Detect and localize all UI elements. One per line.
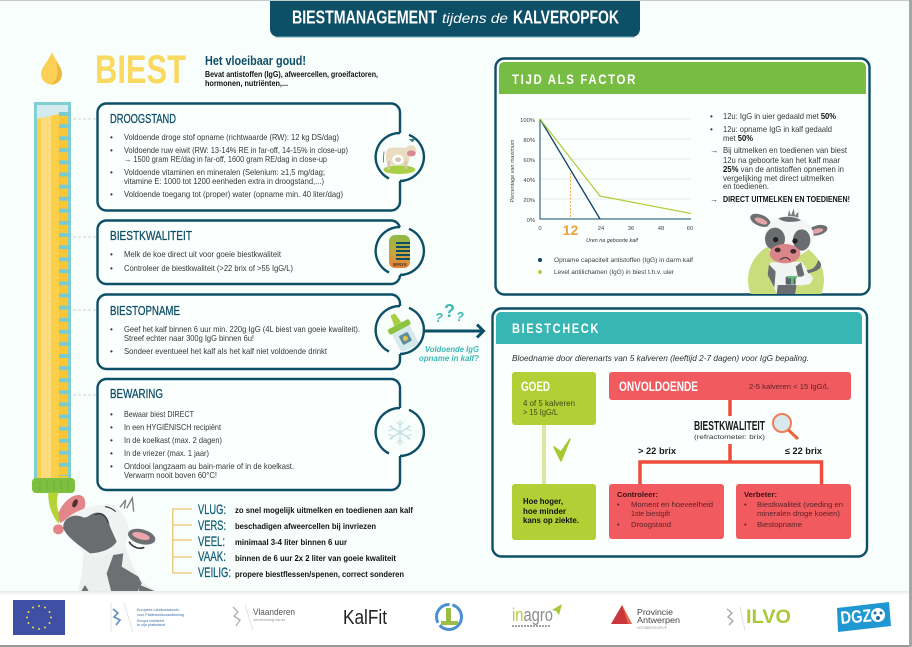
bullet list: bewaring: In de koelkast (max. 2 dagen) bbox=[124, 436, 222, 445]
bullet list: droogstand: • bbox=[110, 146, 113, 155]
logo: Europees Landbouwfonds bbox=[111, 603, 184, 632]
icon: snowflake bbox=[388, 420, 412, 445]
title banner: BIESTMANAGEMENT bbox=[292, 8, 437, 28]
line chart: antibodies over time: 0% bbox=[527, 218, 535, 224]
text: key findings: • bbox=[710, 125, 713, 134]
panel: biestopname bbox=[98, 294, 424, 369]
box: verbeter: Verbeter: bbox=[744, 490, 777, 499]
bullet list: bewaring: • bbox=[110, 449, 113, 458]
box: controleer: • bbox=[617, 520, 620, 529]
arrow to biestcheck bbox=[419, 301, 484, 363]
line chart: antibodies over time: 24 bbox=[598, 226, 605, 232]
question marks: ? bbox=[456, 309, 464, 324]
bullet list: biestkwaliteit: • bbox=[110, 264, 113, 273]
bullet list: droogstand: Voldoende vitaminen en mineralen (Selenium: ≥1,5 mg/dag; bbox=[124, 168, 325, 177]
logo: DGZ bbox=[837, 602, 891, 632]
label: biestkwaliteit refractometer: BIESTKWALITEIT bbox=[694, 419, 765, 433]
VAAK: binnen de 6 uur 2x 2 liter van goeie kwaliteit bbox=[235, 554, 396, 563]
bullet list: biestkwaliteit: Melk de koe direct uit voor goeie biestkwaliteit bbox=[124, 250, 282, 259]
line chart: antibodies over time: 60 bbox=[687, 226, 693, 232]
bullet list: biestkwaliteit: Controleer de biestkwaliteit (>22 brix of >55 IgG/L) bbox=[124, 264, 293, 273]
logo: Europees Landbouwfonds: in zijn platteland bbox=[137, 623, 165, 627]
line chart: antibodies over time: Percentage van maximum bbox=[510, 139, 516, 202]
logo: round L emblem bbox=[436, 604, 462, 630]
text: key findings: 25% van de antistoffen opnemen in bbox=[723, 165, 844, 174]
icon: brix meter: BRIX bbox=[393, 262, 408, 268]
bracket bbox=[173, 509, 192, 573]
bullet list: bewaring: • bbox=[110, 410, 113, 419]
text: key findings: DIRECT UITMELKEN EN TOEDIENEN! bbox=[723, 195, 850, 204]
box: controleer: • bbox=[617, 500, 620, 509]
text: key findings: → bbox=[710, 146, 718, 155]
bullet list: bewaring: Verwarm nooit boven 60°C! bbox=[124, 471, 217, 480]
callout: voldoende IgG opname: opname in kalf? bbox=[419, 354, 479, 363]
intro sentence: Bloedname door dierenarts van 5 kalveren (leeftijd 2-7 dagen) voor IgG bepaling. bbox=[512, 353, 809, 363]
box: hoe hoger: Hoe hoger, bbox=[523, 497, 563, 506]
bullet list: droogstand: • bbox=[110, 168, 113, 177]
text: key findings: 12u: IgG in uier gedaald met 50% bbox=[723, 112, 837, 121]
box: hoe hoger: hoe minder bbox=[523, 507, 566, 516]
text: key findings: met 50% bbox=[723, 134, 754, 143]
text: key findings: Bij uitmelken en toedienen van biest bbox=[723, 146, 848, 155]
decision tree connectors bbox=[640, 400, 822, 484]
box: onvoldoende: 2-5 kalveren < 15 IgG/L bbox=[749, 382, 829, 391]
bullet list: biestkwaliteit: • bbox=[110, 250, 113, 259]
logo: Europees Landbouwfonds: voor Plattelandsontwikkeling bbox=[137, 613, 184, 617]
bullet list: bewaring: • bbox=[110, 462, 113, 471]
logo: Vlaanderen: Vlaanderen bbox=[253, 607, 295, 618]
line chart: antibodies over time bbox=[510, 118, 693, 244]
bullet list: droogstand bbox=[110, 133, 348, 199]
panel: biestkwaliteit bbox=[98, 220, 424, 284]
title banner: KALVEROPFOK bbox=[513, 8, 619, 28]
box: onvoldoende bbox=[609, 372, 851, 400]
VEILIG bbox=[198, 564, 404, 580]
intro text: Bevat antistoffen (IgG), afweercellen, groeifactoren, bbox=[205, 70, 378, 79]
chart legend: Opname capaciteit antistoffen (IgG) in darm kalf bbox=[554, 257, 693, 264]
line chart: antibodies over time: 100% bbox=[520, 118, 535, 124]
line chart: antibodies over time: 12 bbox=[563, 222, 578, 238]
line chart: antibodies over time: 20% bbox=[523, 198, 535, 204]
heading: BIEST: BIEST bbox=[95, 48, 186, 92]
illustration: calf drinking bbox=[48, 493, 160, 593]
bullet list: bewaring: Ontdooi langzaam au bain-marie of in de koelkast. bbox=[124, 462, 294, 471]
VEILIG: propere biestflessen/spenen, correct sonderen bbox=[235, 570, 404, 579]
chart legend: Level antilichamen (IgG) in biest t.h.v. uier bbox=[554, 269, 675, 276]
icon: feeding bottle bbox=[382, 309, 421, 354]
logo: Vlaanderen bbox=[233, 605, 295, 630]
panel: droogstand bbox=[98, 104, 424, 210]
bullet list: droogstand: Voldoende ruw eiwit (RW: 13-14% RE in far-off, 14-15% in close-up) bbox=[124, 146, 348, 155]
VERS bbox=[198, 517, 376, 533]
bullet list: bewaring: In de vriezer (max. 1 jaar) bbox=[124, 449, 209, 458]
header: biestcheck bbox=[496, 312, 862, 344]
heading: biestopname: BIESTOPNAME bbox=[110, 303, 180, 318]
logo: KalFit: KalFit bbox=[343, 607, 387, 629]
logo: ILVO: ILVO bbox=[746, 607, 791, 628]
heading: biestkwaliteit: BIESTKWALITEIT bbox=[110, 228, 192, 243]
title banner: tijdens de bbox=[442, 10, 508, 26]
bullet list: bewaring: • bbox=[110, 436, 113, 445]
icon: brix meter bbox=[389, 235, 410, 268]
panel: tijd als factor bbox=[496, 58, 870, 318]
VERS: beschadigen afweercellen bij invriezen bbox=[235, 522, 376, 531]
header: tijd als factor: TIJD ALS FACTOR bbox=[512, 71, 637, 87]
box: goed: 4 of 5 kalveren bbox=[523, 399, 575, 408]
VEILIG: VEILIG: bbox=[198, 564, 231, 580]
callout: voldoende IgG opname bbox=[419, 345, 479, 363]
heading: droogstand: DROOGSTAND bbox=[110, 111, 176, 126]
box: verbeter: mineralen droge koeien) bbox=[757, 509, 840, 518]
logo: Vlaanderen: verbeelding werkt bbox=[253, 617, 286, 622]
box: verbeter: • bbox=[744, 500, 747, 509]
graduated tube of colostrum bbox=[32, 102, 75, 493]
bullet list: biestopname bbox=[110, 325, 360, 356]
bullet list: droogstand: Voldoende droge stof opname (richtwaarde (RW): 12 kg DS/dag) bbox=[124, 133, 339, 142]
bullet list: bewaring: Bewaar biest DIRECT bbox=[124, 410, 194, 419]
box: hoe hoger bbox=[512, 484, 596, 540]
text: key findings: vergelijking met direct uitmelken bbox=[723, 174, 834, 183]
box: goed bbox=[512, 372, 596, 425]
VEEL: minimaal 3-4 liter binnen 6 uur bbox=[235, 538, 347, 547]
heading: bewaring: BEWARING bbox=[110, 386, 163, 401]
header: tijd als factor bbox=[499, 62, 866, 94]
bullet list: droogstand: vitamine E: 1000 tot 1200 eenheden extra in droogstand,...) bbox=[124, 177, 324, 186]
logo: DGZ: DGZ bbox=[840, 605, 872, 628]
box: verbeter bbox=[736, 484, 851, 539]
box: goed: > 15 IgG/L bbox=[523, 408, 559, 417]
bullet list: biestopname: Geef het kalf binnen 6 uur min. 220g IgG (4L biest van goeie kwaliteit). bbox=[124, 325, 360, 334]
illustration: sad calf with bottle bbox=[748, 208, 828, 294]
text: key findings: en toedienen. bbox=[723, 182, 769, 191]
title banner bbox=[270, 1, 640, 38]
logo: Europees Landbouwfonds: Europees Landbouwfonds bbox=[137, 608, 179, 612]
intro text bbox=[205, 54, 378, 88]
VAAK: VAAK: bbox=[198, 548, 226, 564]
logo: inagro: inagro bbox=[512, 605, 553, 625]
text: key findings bbox=[710, 112, 850, 204]
bullet list: biestopname: • bbox=[110, 325, 113, 334]
label: biestkwaliteit refractometer bbox=[694, 419, 765, 441]
list: the five V's bbox=[173, 501, 413, 580]
logo: Provincie Antwerpen: Provincie bbox=[637, 608, 674, 617]
intro text: hormonen, nutriënten,... bbox=[205, 79, 288, 88]
text: key findings: → bbox=[710, 195, 718, 204]
box: controleer: Droogstand bbox=[631, 520, 671, 529]
box: onvoldoende: ONVOLDOENDE bbox=[619, 378, 698, 394]
line chart: antibodies over time: 60% bbox=[523, 158, 535, 164]
question marks: ? bbox=[435, 310, 443, 325]
VAAK bbox=[198, 548, 396, 564]
intro text: Het vloeibaar goud! bbox=[205, 54, 306, 68]
logo: Europees Landbouwfonds: Europa investeert bbox=[137, 619, 164, 623]
chart legend bbox=[538, 257, 693, 276]
box: verbeter: Biestopname bbox=[757, 520, 802, 529]
question marks bbox=[435, 301, 464, 325]
line chart: antibodies over time: 40% bbox=[523, 178, 535, 184]
logo: EU flag bbox=[13, 600, 65, 635]
label: biestkwaliteit refractometer: (refractometer: brix) bbox=[694, 434, 765, 441]
bullet list: bewaring bbox=[110, 410, 294, 480]
bullet list: biestkwaliteit bbox=[110, 250, 293, 273]
footer: partner logos bbox=[0, 591, 912, 645]
header: biestcheck: BIESTCHECK bbox=[512, 320, 600, 336]
VEEL: VEEL: bbox=[198, 533, 225, 549]
bullet list: biestopname: Streef echter naar 300g IgG binnen 6u! bbox=[124, 334, 254, 343]
VERS: VERS: bbox=[198, 517, 226, 533]
text: key findings: • bbox=[710, 112, 713, 121]
icon: check mark bbox=[554, 439, 570, 461]
VLUG bbox=[198, 501, 413, 517]
box: hoe hoger: kans op ziekte. bbox=[523, 516, 579, 525]
VEEL bbox=[198, 533, 347, 549]
icon: golden drop bbox=[41, 52, 62, 85]
panel: bewaring bbox=[98, 379, 424, 490]
bullet list: bewaring: • bbox=[110, 423, 113, 432]
VLUG: VLUG: bbox=[198, 501, 226, 517]
question marks: ? bbox=[444, 301, 455, 321]
icon: magnifying glass bbox=[773, 414, 798, 439]
bullet list: droogstand: Voldoende toegang tot (proper) water (opname min. 40 liter/dag) bbox=[124, 190, 343, 199]
logo: Provincie Antwerpen: HOOIBEEKHOEVE bbox=[637, 626, 667, 630]
line chart: antibodies over time: 36 bbox=[628, 226, 634, 232]
line chart: antibodies over time: 80% bbox=[523, 138, 535, 144]
panel: biestcheck bbox=[492, 308, 867, 556]
bullet list: droogstand: → 1500 gram RE/dag in far-off, 1600 gram RE/dag in close-up bbox=[124, 155, 327, 164]
bullet list: biestopname: • bbox=[110, 347, 113, 356]
text: key findings: 12u na geboorte kan het kalf maar bbox=[723, 156, 840, 165]
logo: ILVO bbox=[727, 607, 791, 631]
box: controleer bbox=[609, 484, 724, 539]
bullet list: bewaring: In een HYGIËNISCH recipiënt bbox=[124, 422, 222, 432]
VLUG: zo snel mogelijk uitmelken en toedienen aan kalf bbox=[235, 506, 413, 515]
bullet list: droogstand: • bbox=[110, 133, 113, 142]
box: goed: GOED bbox=[521, 378, 550, 394]
logo: Provincie Antwerpen: Antwerpen bbox=[637, 616, 680, 625]
icon: pregnant cow bbox=[383, 139, 416, 174]
line chart: antibodies over time: 0 bbox=[538, 226, 542, 232]
line chart: antibodies over time: Uren na geboorte kalf bbox=[586, 238, 638, 244]
bullet list: droogstand: • bbox=[110, 190, 113, 199]
line chart: antibodies over time: 48 bbox=[658, 226, 664, 232]
box: verbeter: Biestkwaliteit (voeding en bbox=[757, 500, 843, 509]
label: more than 22 brix: > 22 brix bbox=[638, 446, 676, 456]
box: controleer: Moment en hoeveelheid bbox=[631, 500, 713, 509]
box: controleer: Controleer: bbox=[617, 490, 658, 499]
box: verbeter: • bbox=[744, 520, 747, 529]
logo: Provincie Antwerpen bbox=[611, 605, 680, 630]
callout: voldoende IgG opname: Voldoende IgG bbox=[425, 345, 479, 354]
label: at most 22 brix: ≤ 22 brix bbox=[785, 446, 822, 456]
box: controleer: 1ste biestgift bbox=[631, 509, 670, 518]
text: key findings: 12u: opname IgG in kalf gedaald bbox=[723, 125, 832, 134]
bullet list: biestopname: Sondeer eventueel het kalf als het kalf niet voldoende drinkt bbox=[124, 347, 328, 356]
